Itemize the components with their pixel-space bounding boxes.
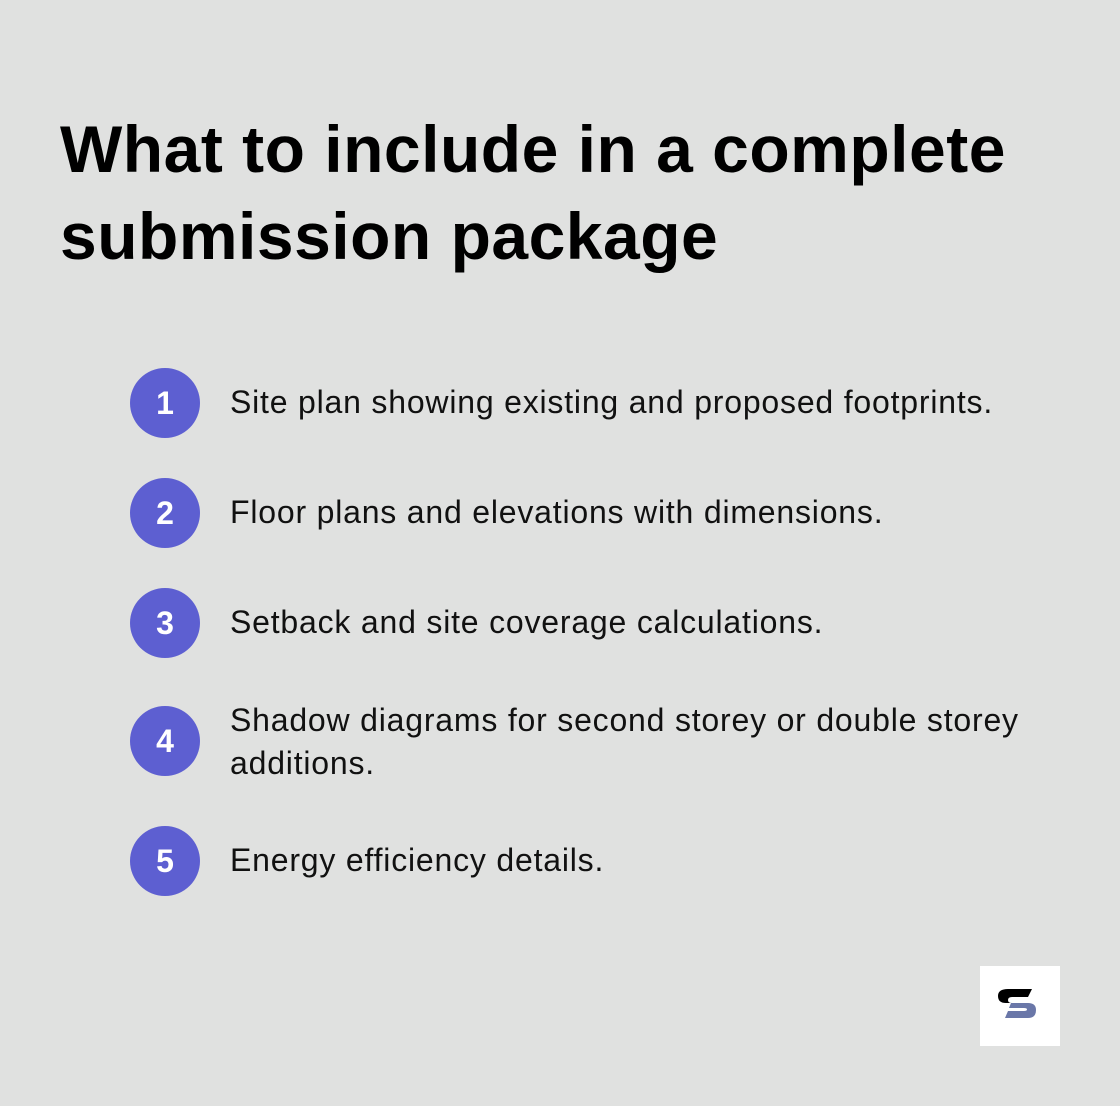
item 1: 1 (156, 385, 174, 421)
item 2 (130, 478, 883, 548)
item 4: 4 (156, 723, 174, 759)
item 5 (130, 826, 604, 896)
logo (980, 966, 1060, 1046)
item 3: 3 (156, 605, 174, 641)
item 3: Setback and site coverage calculations. (230, 604, 823, 640)
item 1: Site plan showing existing and proposed footprints. (230, 384, 993, 420)
title: What to include in a complete (60, 112, 1006, 186)
item 4: Shadow diagrams for second storey or double storey additions. (230, 702, 1019, 781)
title (60, 112, 1006, 273)
item 1 (130, 368, 993, 438)
item 5: Energy efficiency details. (230, 842, 604, 878)
item 3 (130, 588, 823, 658)
item 2: Floor plans and elevations with dimensions. (230, 494, 883, 530)
title: submission package (60, 199, 718, 273)
item 5: 5 (156, 843, 174, 879)
item 2: 2 (156, 495, 174, 531)
